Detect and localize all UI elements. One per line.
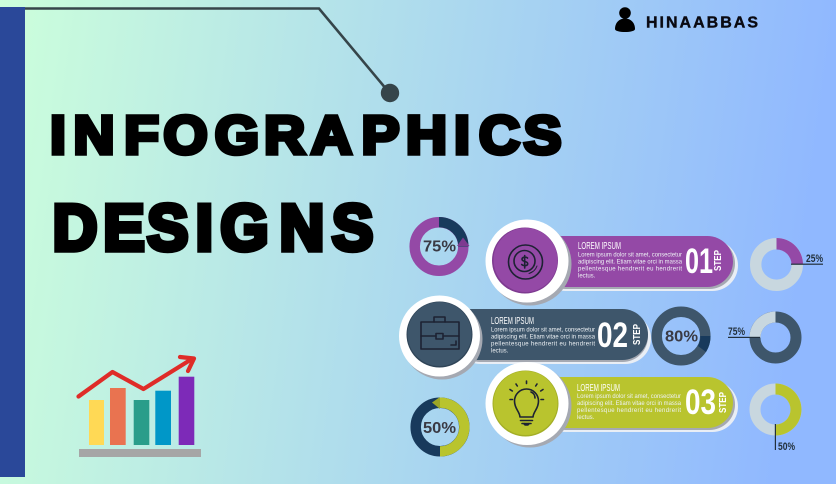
donut: 75% xyxy=(415,217,470,271)
step number: 01 xyxy=(685,242,713,281)
circle badge xyxy=(488,364,572,448)
donut: 50%: 50% xyxy=(423,420,456,437)
icon: briefcase xyxy=(421,317,459,349)
donut: 50% right xyxy=(755,384,801,453)
pill shadow xyxy=(540,381,738,432)
body text xyxy=(577,394,682,421)
body text: lectus. xyxy=(577,415,595,421)
heading: LOREM IPSUM xyxy=(578,241,621,252)
step number: 02 xyxy=(597,316,628,355)
donut: 80%: 80% xyxy=(665,329,698,346)
pill xyxy=(530,377,733,428)
step label: STEP xyxy=(718,392,729,413)
body text: Lorem ipsum dolor sit amet, consectetur xyxy=(578,252,682,258)
step label: STEP xyxy=(713,250,724,271)
icon: dollar coin xyxy=(508,245,542,279)
body text: lectus. xyxy=(491,348,509,354)
body text: lectus. xyxy=(578,274,596,280)
pill xyxy=(445,309,648,360)
left blue bar xyxy=(0,7,25,477)
body text: adipiscing elit. Etiam vitae orci in massa xyxy=(491,334,596,340)
donut: 50% xyxy=(416,397,470,456)
brand name: HINAABBAS xyxy=(646,14,758,32)
circle badge xyxy=(488,222,572,306)
brand: person icon and name xyxy=(615,7,758,32)
step number: 03 xyxy=(685,383,716,422)
body text: pellentesque hendrerit eu hendrerit xyxy=(577,408,681,414)
body text: Lorem ipsum dolor sit amet, consectetur xyxy=(577,394,681,400)
body text xyxy=(578,252,683,280)
title: INFOGRAPHICS: INFOGRAPHICS xyxy=(50,105,561,165)
body text: adipiscing elit. Etiam vitae orci in massa xyxy=(578,260,683,266)
icon: rising bar chart xyxy=(78,357,201,457)
donut: 50% right: 50% xyxy=(778,441,795,453)
step 1 panel xyxy=(486,220,738,306)
donut: 75%: 75% xyxy=(423,239,456,256)
step 3 panel xyxy=(486,362,738,448)
step 2 panel xyxy=(399,296,651,380)
donut: 75% right xyxy=(728,312,796,358)
donut: 80% xyxy=(657,312,711,360)
body text: pellentesque hendrerit eu hendrerit xyxy=(578,266,682,272)
donut: 25%: 25% xyxy=(806,253,823,265)
body text: pellentesque hendrerit eu hendrerit xyxy=(491,342,595,348)
step label: STEP xyxy=(632,324,643,345)
icon: light bulb xyxy=(510,381,544,425)
body text: adipiscing elit. Etiam vitae orci in massa xyxy=(577,401,682,407)
pill shadow xyxy=(540,240,738,291)
body text xyxy=(491,328,596,354)
donut: 75% right: 75% xyxy=(728,326,745,338)
pill xyxy=(530,236,733,287)
heading: LOREM IPSUM xyxy=(577,383,620,394)
pill shadow xyxy=(455,313,651,364)
connector line with dot xyxy=(25,8,399,102)
donut: 25% xyxy=(756,238,823,285)
heading: LOREM IPSUM xyxy=(491,316,534,327)
circle badge xyxy=(402,298,482,380)
title: DESIGNS: DESIGNS xyxy=(53,193,373,265)
body text: Lorem ipsum dolor sit amet, consectetur xyxy=(491,328,595,334)
icon: person xyxy=(615,7,635,32)
